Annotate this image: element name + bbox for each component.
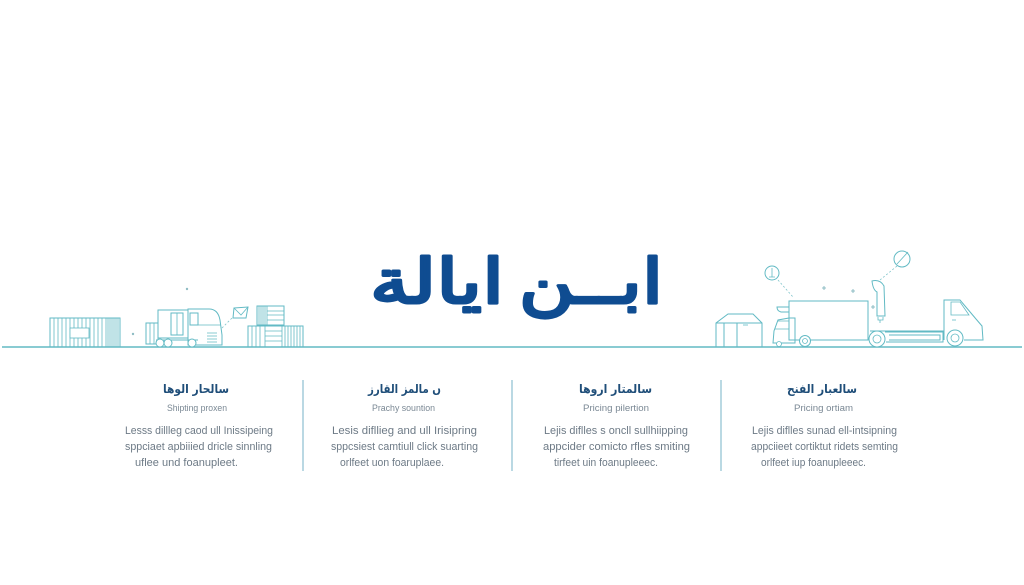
body text: column 2: Lesis difllieg and ull Irisipring	[332, 425, 477, 437]
decorative dots	[132, 288, 188, 335]
subheading: column 3: Pricing pilertion	[583, 403, 649, 413]
ground line	[2, 346, 1022, 348]
body text: column 2: orlfeet uon foaruplaee.	[340, 457, 444, 469]
body text: column 4: orlfeet iup foanupleeec.	[761, 457, 866, 469]
illustration: delivery truck	[146, 309, 222, 347]
body text: column 4: appciieet cortiktut ridets semting	[751, 441, 898, 453]
icon: clock badge with connector	[765, 266, 793, 297]
illustration: warehouse shed	[716, 314, 762, 347]
heading: column 2: ں مالمز القارز	[367, 382, 441, 396]
title	[370, 245, 663, 318]
heading: column 1: سالحار الوها	[163, 382, 229, 397]
body text: column 4	[751, 425, 898, 469]
illustration: box truck	[773, 301, 868, 346]
panel: column 1	[125, 382, 273, 469]
heading: column 3: سالمتار اروها	[579, 382, 652, 397]
illustration: stacked boxes	[248, 306, 303, 347]
body text: column 3: appcider comicto rfles smiting	[543, 441, 690, 453]
body text: column 2	[331, 425, 478, 469]
decorative plus marks	[822, 286, 875, 309]
body text: column 3	[543, 425, 690, 469]
body text: column 4: Lejis diflles sunad ell-intsipning	[752, 425, 897, 437]
column dividers	[303, 380, 721, 471]
body text: column 1: uflee und foanupleet.	[135, 457, 238, 469]
icon: leaf badge with connector	[880, 251, 910, 280]
subheading: column 2: Prachy sountion	[372, 403, 435, 413]
panel: column 2	[331, 382, 478, 469]
body text: column 3: tirfeet uin foanupleeec.	[554, 457, 658, 469]
panel: column 3	[543, 382, 690, 469]
illustration: exhaust pipe	[872, 281, 885, 323]
body text: column 1	[125, 425, 273, 469]
subheading: column 1: Shipting proxen	[167, 403, 227, 413]
body text: column 1: Lesss dillleg caod ull Inissipeing	[125, 425, 273, 437]
body text: column 2: sppcsiest camtiull click suarting	[331, 441, 478, 453]
body text: column 3: Lejis diflles s oncll sullhiipping	[544, 425, 688, 437]
illustration: flatbed truck	[869, 300, 983, 347]
subheading: column 4: Pricing ortiam	[794, 403, 853, 413]
icon: envelope with connector	[222, 307, 248, 328]
panel: column 4	[751, 382, 898, 469]
heading: column 4: سالعبار الفنح	[787, 382, 857, 396]
title: ايالة	[370, 245, 504, 318]
title: ابــن	[519, 245, 663, 318]
illustration: shipping container	[50, 318, 120, 347]
body text: column 1: sppciaet apbiiied dricle sinnling	[125, 441, 272, 453]
